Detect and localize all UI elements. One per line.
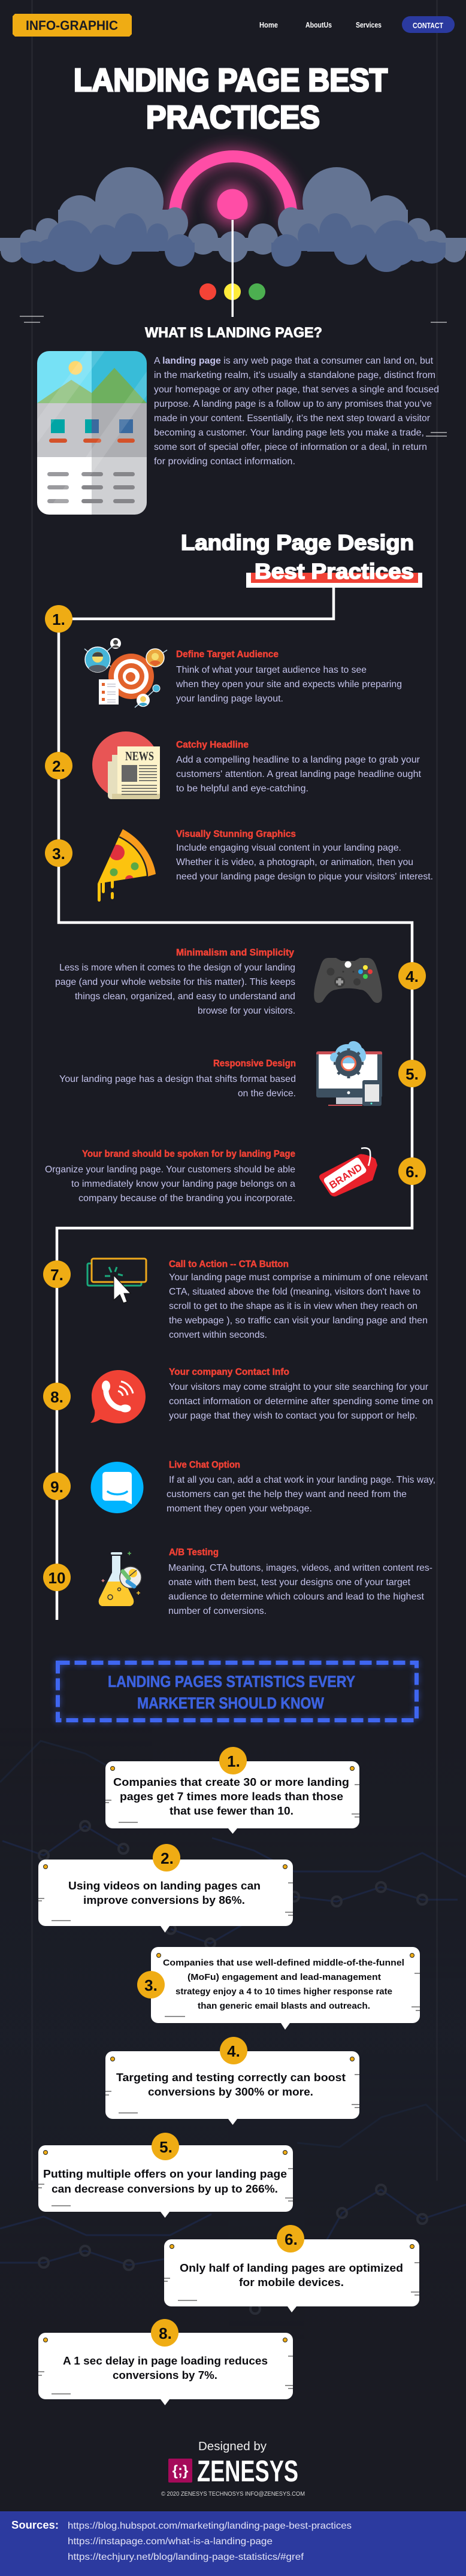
icon: A/B test flask	[99, 1552, 141, 1606]
navigation links: AboutUs	[305, 20, 332, 29]
logo badge: INFO-GRAPHIC	[26, 18, 118, 33]
text: define target audience	[175, 649, 402, 704]
text: brand spoken for by landing page: Organize your landing page. Your customers should be able	[45, 1165, 295, 1175]
step 7 badge: 7.	[50, 1266, 63, 1284]
navigation links: Services	[356, 20, 382, 29]
text: minimalism and simplicity: Minimalism and Simplicity	[176, 948, 294, 958]
heading: landing page design best practices: Landing Page Design	[181, 530, 414, 555]
stat card 3: (MoFu) engagement and lead-management	[187, 1972, 381, 1982]
credit: designed by zenesys: ZENESYS	[197, 2454, 298, 2488]
icon: game controller	[314, 958, 382, 1003]
step 6 badge: 6.	[406, 1163, 419, 1181]
step 1 badge: 1.	[52, 610, 65, 628]
stat card 5: 5.	[159, 2138, 173, 2156]
text: company contact info: contact information or determine after spending some time on	[169, 1396, 433, 1407]
stat card 4: Targeting and testing correctly can boost	[116, 2072, 346, 2084]
step 9 badge	[43, 1473, 71, 1500]
stat card 3: than generic email blasts and outreach.	[198, 2001, 370, 2011]
text: catchy headline	[176, 740, 422, 794]
icon: responsive devices	[316, 1041, 382, 1106]
stat card 2: improve conversions by 86%.	[83, 1894, 245, 1906]
text: visually stunning graphics: Visually Stunning Graphics	[176, 829, 296, 839]
logo badge	[13, 14, 132, 37]
step 9 badge: 9.	[50, 1478, 63, 1496]
text: responsive design: Your landing page has a design that shifts format based	[59, 1074, 296, 1084]
text: responsive design: Responsive Design	[213, 1059, 296, 1069]
sources footer: https://techjury.net/blog/landing-page-statistics/#gref	[68, 2552, 304, 2562]
text: call to action: CTA, situated above the fold (meaning, visitors don't have to	[169, 1287, 420, 1297]
text: call to action: scroll to get to the shape as it is in view when they reach on	[169, 1301, 417, 1311]
icon: phone call bubble	[90, 1370, 146, 1423]
text: A/B testing: A/B Testing	[169, 1547, 219, 1558]
icon: newspaper: NEWS	[125, 749, 154, 763]
navigation links: Home	[259, 20, 278, 29]
stat card 5: Putting multiple offers on your landing page	[43, 2168, 287, 2180]
background line chart	[0, 1725, 466, 2342]
text: visually stunning graphics: need your landing page design to pique your visitors' interest.	[176, 872, 433, 882]
step 5 badge	[398, 1060, 426, 1087]
text: call to action: Call to Action -- CTA Button	[169, 1259, 289, 1269]
sources footer: Sources:	[11, 2519, 59, 2531]
text: landing page definition: for providing contact information.	[154, 456, 295, 467]
text: landing page definition: some sort of special offer, piece of information or a deal, in return	[154, 442, 427, 452]
stat card 3: strategy enjoy a 4 to 10 times higher response rate	[175, 1987, 392, 1997]
icon: landing page wireframe	[37, 351, 147, 515]
title: PRACTICES	[146, 99, 320, 135]
text: minimalism and simplicity	[55, 948, 295, 1016]
step 1 badge	[45, 605, 72, 633]
stat card 1	[105, 1747, 359, 1834]
heading: statistics dashed box: LANDING PAGES STATISTICS EVERY	[108, 1673, 355, 1691]
icon: brand tag: BRAND	[327, 1162, 364, 1191]
text: company contact info: your page that they wish to contact you for support or help.	[169, 1411, 417, 1421]
text: company contact info	[169, 1367, 433, 1421]
hero illustration: neon arch and clouds	[0, 156, 466, 272]
traffic light dots	[199, 220, 265, 317]
stat card 6	[164, 2225, 419, 2312]
text: catchy headline: customers' attention. A great landing page headline ought	[176, 769, 422, 779]
text: A/B testing: number of conversions.	[168, 1606, 267, 1616]
text: landing page definition: made in your content. Essentially, it’s the next step toward a visitor	[154, 413, 431, 424]
text: brand spoken for by landing page: company because of the branding you incorporate.	[78, 1193, 295, 1204]
text: landing page definition: A landing page is any web page that a consumer can land on, but	[154, 356, 434, 366]
text: call to action	[169, 1259, 428, 1340]
sources footer	[0, 2511, 466, 2576]
text: call to action: the webpage ), so traffic can visit your landing page and then	[169, 1316, 428, 1326]
text: define target audience: Think of what your target audience has to see	[176, 665, 367, 675]
text: define target audience: Define Target Audience	[176, 649, 279, 660]
text: brand spoken for by landing page	[45, 1149, 295, 1204]
text: company contact info: Your company Contact Info	[169, 1367, 289, 1377]
stat card 3	[137, 1947, 420, 2030]
contact button	[402, 16, 455, 33]
text: define target audience: when they open your site and expects while preparing	[175, 679, 402, 690]
step 3 badge	[45, 839, 72, 867]
logo mark	[168, 2459, 192, 2483]
step 4 badge	[398, 962, 426, 990]
step 2 badge: 2.	[52, 757, 65, 775]
logo mark: {;}	[173, 2463, 188, 2479]
icon: pizza slice	[98, 829, 156, 902]
text: company contact info: Your visitors may come straight to your site searching for your	[169, 1382, 429, 1392]
heading: landing page design best practices	[181, 530, 422, 588]
heading: statistics dashed box	[58, 1663, 417, 1721]
text: landing page definition	[154, 356, 439, 467]
text: landing page definition: becoming a customer. Your landing page lets you make a trade,	[154, 428, 424, 438]
text: catchy headline: to be helpful and eye-catching.	[176, 784, 308, 794]
text: landing page definition: purpose. A landing page is a follow up to any promises that you’ve	[154, 399, 432, 409]
stat card 3: Companies that use well-defined middle-of-the-funnel	[163, 1958, 404, 1968]
step 10 badge: 10	[49, 1569, 65, 1587]
credit: designed by zenesys	[161, 2440, 305, 2498]
text: minimalism and simplicity: Less is more when it comes to the design of your landing	[59, 963, 295, 973]
stat card 5	[38, 2133, 293, 2218]
text: visually stunning graphics	[176, 829, 433, 882]
text: landing page definition: in the marketing realm, it’s usually a standalone page, distinct from	[154, 370, 435, 380]
step 7 badge	[43, 1260, 71, 1288]
text: live chat option: If at all you can, add a chat work in your landing page. This way,	[169, 1475, 435, 1485]
sources footer: https://instapage.com/what-is-a-landing-page	[68, 2536, 273, 2547]
heading: what is landing page: WHAT IS LANDING PAGE?	[145, 325, 322, 341]
text: A/B testing: audience to determine which colours and lead to the highest	[168, 1592, 425, 1602]
text: minimalism and simplicity: page (and your whole website for this matter). This keeps	[55, 977, 295, 987]
stat card 1: pages get 7 times more leads than those	[120, 1791, 343, 1803]
title: LANDING PAGE BEST	[74, 62, 388, 98]
text: live chat option: Live Chat Option	[169, 1460, 240, 1470]
stat card 2	[38, 1844, 293, 1933]
sources footer: https://blog.hubspot.com/marketing/landing-page-best-practices	[68, 2521, 352, 2531]
stat card 8	[38, 2319, 293, 2405]
stat card 5: can decrease conversions by up to 266%.	[52, 2183, 278, 2195]
text: live chat option: moment they open your webpage.	[167, 1504, 312, 1514]
credit: designed by zenesys: Designed by	[198, 2440, 267, 2453]
icon: newspaper	[92, 731, 160, 799]
text: minimalism and simplicity: things clean, organized, and easy to understand and	[75, 991, 295, 1002]
stat card 4	[105, 2037, 359, 2125]
text: visually stunning graphics: Include engaging visual content in your landing page.	[176, 843, 401, 853]
heading: statistics dashed box: MARKETER SHOULD KNOW	[137, 1694, 324, 1712]
text: responsive design: on the device.	[238, 1089, 296, 1099]
step 3 badge: 3.	[52, 845, 65, 863]
icon: target audience	[84, 638, 167, 708]
stat card 1: Companies that create 30 or more landing	[113, 1776, 349, 1788]
text: call to action: convert within seconds.	[169, 1330, 267, 1340]
text: live chat option: customers can get the help they want and need from the	[167, 1489, 407, 1499]
step 8 badge	[43, 1383, 71, 1410]
contact button: CONTACT	[413, 21, 443, 30]
icon: live chat	[91, 1462, 144, 1513]
icon: CTA button and cursor	[87, 1259, 146, 1303]
stat card 2: Using videos on landing pages can	[68, 1880, 261, 1892]
stat card 8: conversions by 7%.	[113, 2369, 217, 2381]
icon: brand tag	[319, 1148, 377, 1196]
text: call to action: Your landing page must comprise a minimum of one relevant	[169, 1272, 428, 1283]
step 6 badge	[398, 1157, 426, 1185]
stat card 6: for mobile devices.	[239, 2276, 344, 2288]
navigation links	[259, 20, 382, 29]
stat card 1: that use fewer than 10.	[170, 1805, 293, 1817]
text: brand spoken for by landing page: Your brand should be spoken for by landing Page	[82, 1149, 295, 1159]
text: A/B testing: onate with them best, test your designs one of your target	[168, 1577, 411, 1588]
stat card 8: A 1 sec delay in page loading reduces	[63, 2355, 268, 2367]
stat card 2: 2.	[161, 1849, 174, 1867]
stat card 4: conversions by 300% or more.	[148, 2086, 313, 2098]
stat card 4: 4.	[227, 2042, 240, 2060]
credit: designed by zenesys: © 2020 ZENESYS TECHNOSYS INFO@ZENESYS.COM	[161, 2490, 305, 2498]
stat card 8: 8.	[159, 2324, 172, 2342]
stat card 6: 6.	[285, 2230, 298, 2248]
text: minimalism and simplicity: browse for your visitors.	[198, 1006, 295, 1016]
text: landing page definition: your homepage or any other page, that serves a single and focused	[154, 385, 439, 395]
title	[74, 62, 388, 135]
stat card 6: Only half of landing pages are optimized	[180, 2262, 403, 2274]
text: define target audience: your landing page layout.	[176, 694, 283, 704]
stat card 1: 1.	[227, 1752, 240, 1770]
header bar	[13, 14, 455, 37]
text: brand spoken for by landing page: to immediately know your landing page belongs on a	[71, 1179, 295, 1189]
text: A/B testing	[168, 1547, 432, 1616]
timeline connector	[57, 588, 412, 1620]
text: catchy headline: Catchy Headline	[176, 740, 249, 750]
text: visually stunning graphics: Whether it is video, a photograph, or animation, then you	[176, 857, 413, 867]
step 8 badge: 8.	[50, 1388, 63, 1406]
step 5 badge: 5.	[406, 1065, 419, 1083]
text: live chat option	[167, 1460, 435, 1514]
heading: landing page design best practices: Best Practices	[255, 559, 414, 583]
text: A/B testing: Meaning, CTA buttons, images, videos, and written content res-	[168, 1563, 432, 1573]
step 2 badge	[45, 752, 72, 779]
text: catchy headline: Add a compelling headline to a landing page to grab your	[176, 755, 420, 765]
step 4 badge: 4.	[406, 967, 419, 985]
step 10 badge	[43, 1564, 71, 1591]
stat card 3: 3.	[144, 1976, 158, 1994]
text: responsive design	[59, 1059, 296, 1099]
